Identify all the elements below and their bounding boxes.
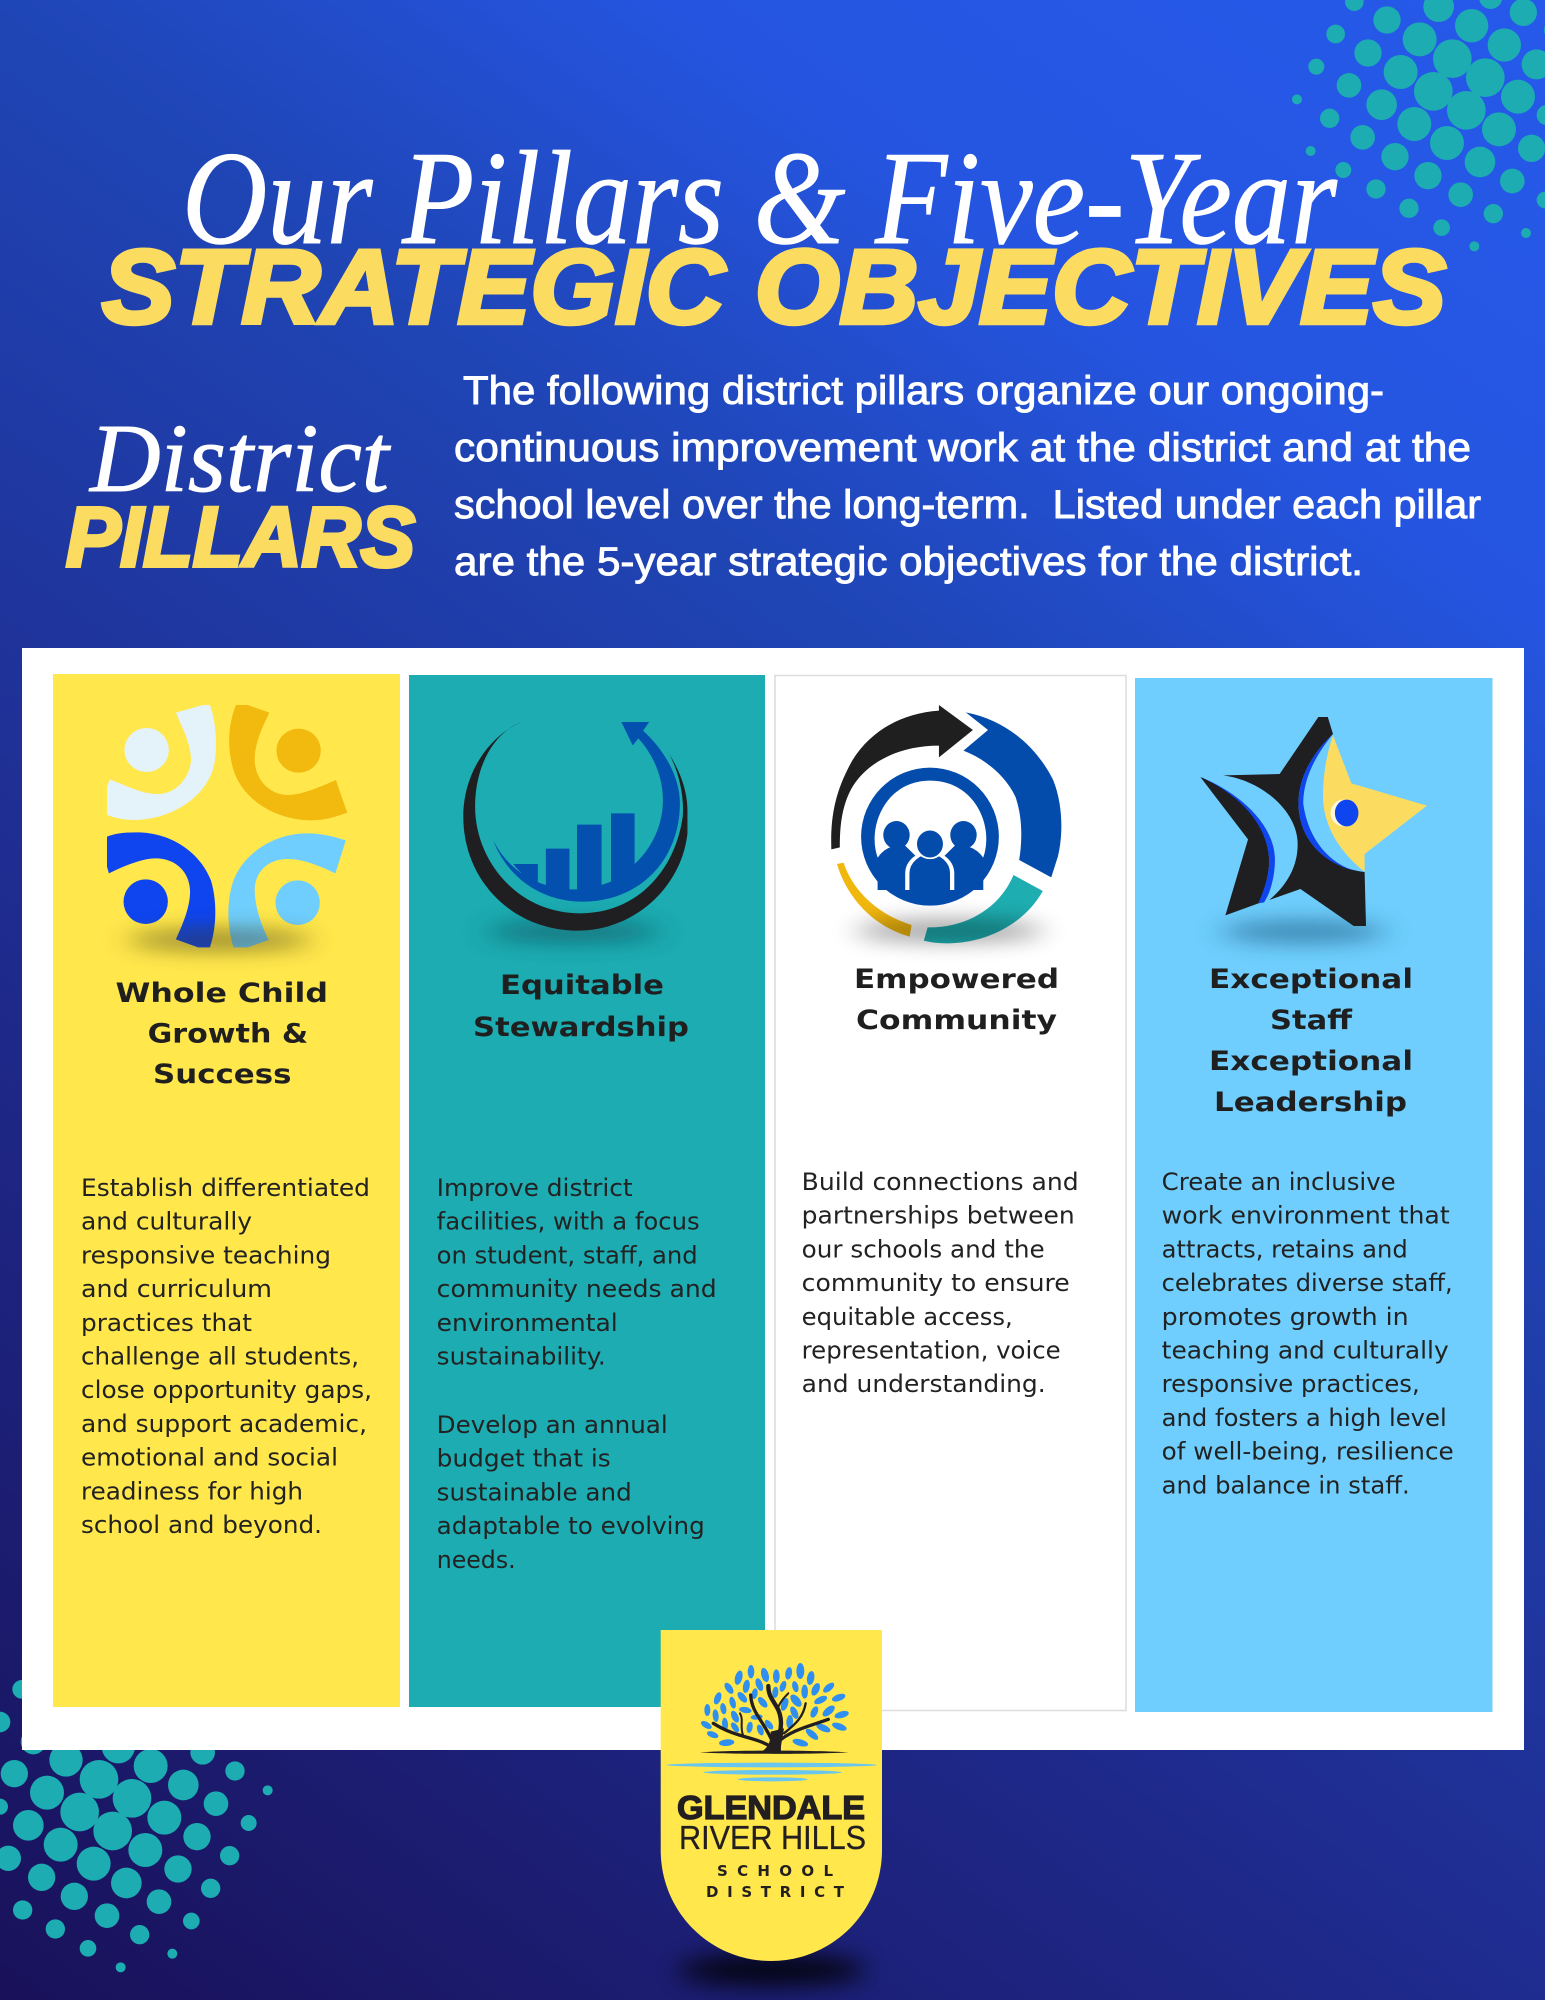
- panel body text: Create an inclusive: [1162, 1168, 1396, 1196]
- panel body text: [1162, 1168, 1454, 1499]
- panel heading: Growth &: [148, 1018, 308, 1050]
- panel body text: facilities, with a focus: [437, 1208, 700, 1236]
- panel body text: needs.: [437, 1546, 516, 1574]
- panel heading: Leadership: [1214, 1087, 1407, 1118]
- heading script word: District: [88, 405, 391, 512]
- panel body text: [802, 1168, 1079, 1398]
- heading: District Pillars: [66, 405, 415, 584]
- panel body text: responsive teaching: [81, 1241, 331, 1269]
- panel body text: representation, voice: [802, 1336, 1061, 1364]
- panel body text: environmental: [437, 1309, 618, 1337]
- intro paragraph: are the 5-year strategic objectives for the district.: [454, 540, 1363, 584]
- panel body text: Establish differentiated: [81, 1174, 370, 1202]
- panel body text: school and beyond.: [81, 1511, 322, 1539]
- panel body text: readiness for high: [81, 1477, 303, 1505]
- logo wordmark: DISTRICT: [706, 1883, 845, 1901]
- panel body text: and understanding.: [802, 1370, 1046, 1398]
- panel body text: promotes growth in: [1162, 1303, 1409, 1331]
- panel body text: community needs and: [437, 1275, 717, 1303]
- panel background teal: [409, 675, 765, 1707]
- panel body text: Build connections and: [802, 1168, 1079, 1196]
- panel heading: [116, 978, 328, 1090]
- logo tree: [667, 1663, 877, 1781]
- panel body text: sustainable and: [437, 1478, 632, 1506]
- logo wordmark: [677, 1789, 866, 1901]
- panel body text: budget that is: [437, 1445, 611, 1473]
- panel body text: challenge all students,: [81, 1342, 359, 1370]
- icon: four figures: [107, 705, 347, 951]
- panel body text: of well-being, resilience: [1162, 1438, 1454, 1466]
- intro paragraph: The following district pillars organize our ongoing-: [463, 369, 1384, 413]
- intro paragraph: continuous improvement work at the district and at the: [454, 426, 1471, 470]
- panel body text: sustainability.: [437, 1342, 606, 1370]
- panel: Whole Child Growth & Success: [53, 674, 400, 1707]
- shield shadow: [677, 1955, 867, 1985]
- logo wordmark: SCHOOL: [717, 1862, 833, 1880]
- panel heading: Whole Child: [116, 978, 328, 1009]
- panel heading: Exceptional: [1209, 1046, 1413, 1077]
- icon: growth chart with arrow: [463, 722, 687, 942]
- panel background yellow: [53, 674, 400, 1707]
- panel heading: Success: [153, 1059, 292, 1090]
- icon: community cycle: [831, 705, 1061, 943]
- panel body text: and support academic,: [81, 1410, 367, 1438]
- panel heading: [473, 970, 689, 1043]
- panel body text: and curriculum: [81, 1275, 272, 1303]
- decorative dots: top right: [1292, 0, 1545, 251]
- panel body text: and fosters a high level: [1162, 1404, 1447, 1432]
- panel heading: Empowered: [854, 964, 1059, 995]
- panel heading: [854, 964, 1059, 1036]
- panel body text: work environment that: [1162, 1202, 1450, 1230]
- panel body text: responsive practices,: [1162, 1370, 1420, 1398]
- panel body text: teaching and culturally: [1162, 1336, 1449, 1364]
- panel heading: Exceptional: [1209, 964, 1413, 995]
- panel body text: and balance in staff.: [1162, 1471, 1410, 1499]
- panel body text: Develop an annual: [437, 1411, 668, 1439]
- panel heading: Equitable: [500, 970, 664, 1001]
- panel body text: attracts, retains and: [1162, 1235, 1408, 1263]
- panel body text: and culturally: [81, 1208, 252, 1236]
- panel body text: on student, staff, and: [437, 1241, 698, 1269]
- logo wordmark: RIVER HILLS: [679, 1819, 866, 1856]
- panel: Exceptional Staff Exceptional Leadership: [1135, 678, 1492, 1712]
- decorative dots: bottom left: [0, 1680, 273, 1972]
- logo shield: [661, 1630, 882, 1985]
- logo wordmark: GLENDALE: [677, 1789, 865, 1826]
- panel body text: equitable access,: [802, 1303, 1013, 1331]
- panel body text: community to ensure: [802, 1269, 1070, 1297]
- panel body text: adaptable to evolving: [437, 1512, 705, 1540]
- panel heading: Stewardship: [473, 1012, 689, 1043]
- heading bold word: PILLARS: [66, 490, 415, 584]
- panel body text: [437, 1174, 717, 1574]
- panel body text: Improve district: [437, 1174, 633, 1202]
- panel body text: partnerships between: [802, 1202, 1075, 1230]
- panel body text: [81, 1174, 372, 1539]
- panel: Equitable Stewardship: [409, 675, 765, 1707]
- panel body text: emotional and social: [81, 1444, 338, 1472]
- icon: star: [1200, 717, 1427, 943]
- panel body text: celebrates diverse staff,: [1162, 1269, 1453, 1297]
- intro paragraph: [454, 369, 1481, 584]
- panel body text: our schools and the: [802, 1235, 1045, 1263]
- panel heading: Staff: [1270, 1005, 1353, 1036]
- panel body text: practices that: [81, 1309, 252, 1337]
- shield shape: [661, 1630, 882, 1961]
- panel body text: close opportunity gaps,: [81, 1376, 372, 1404]
- panel heading: Community: [856, 1005, 1057, 1036]
- title: [102, 124, 1446, 346]
- panel: Empowered Community: [775, 676, 1126, 1710]
- panel background white: [775, 676, 1126, 1710]
- white card: [22, 648, 1524, 1750]
- intro paragraph: school level over the long-term. Listed under each pillar: [454, 483, 1481, 527]
- panel background light blue: [1135, 678, 1492, 1712]
- title line 1: Our Pillars & Five-Year: [182, 124, 1338, 272]
- panel heading: [1209, 964, 1413, 1118]
- title line 2: STRATEGIC OBJECTIVES: [102, 229, 1446, 346]
